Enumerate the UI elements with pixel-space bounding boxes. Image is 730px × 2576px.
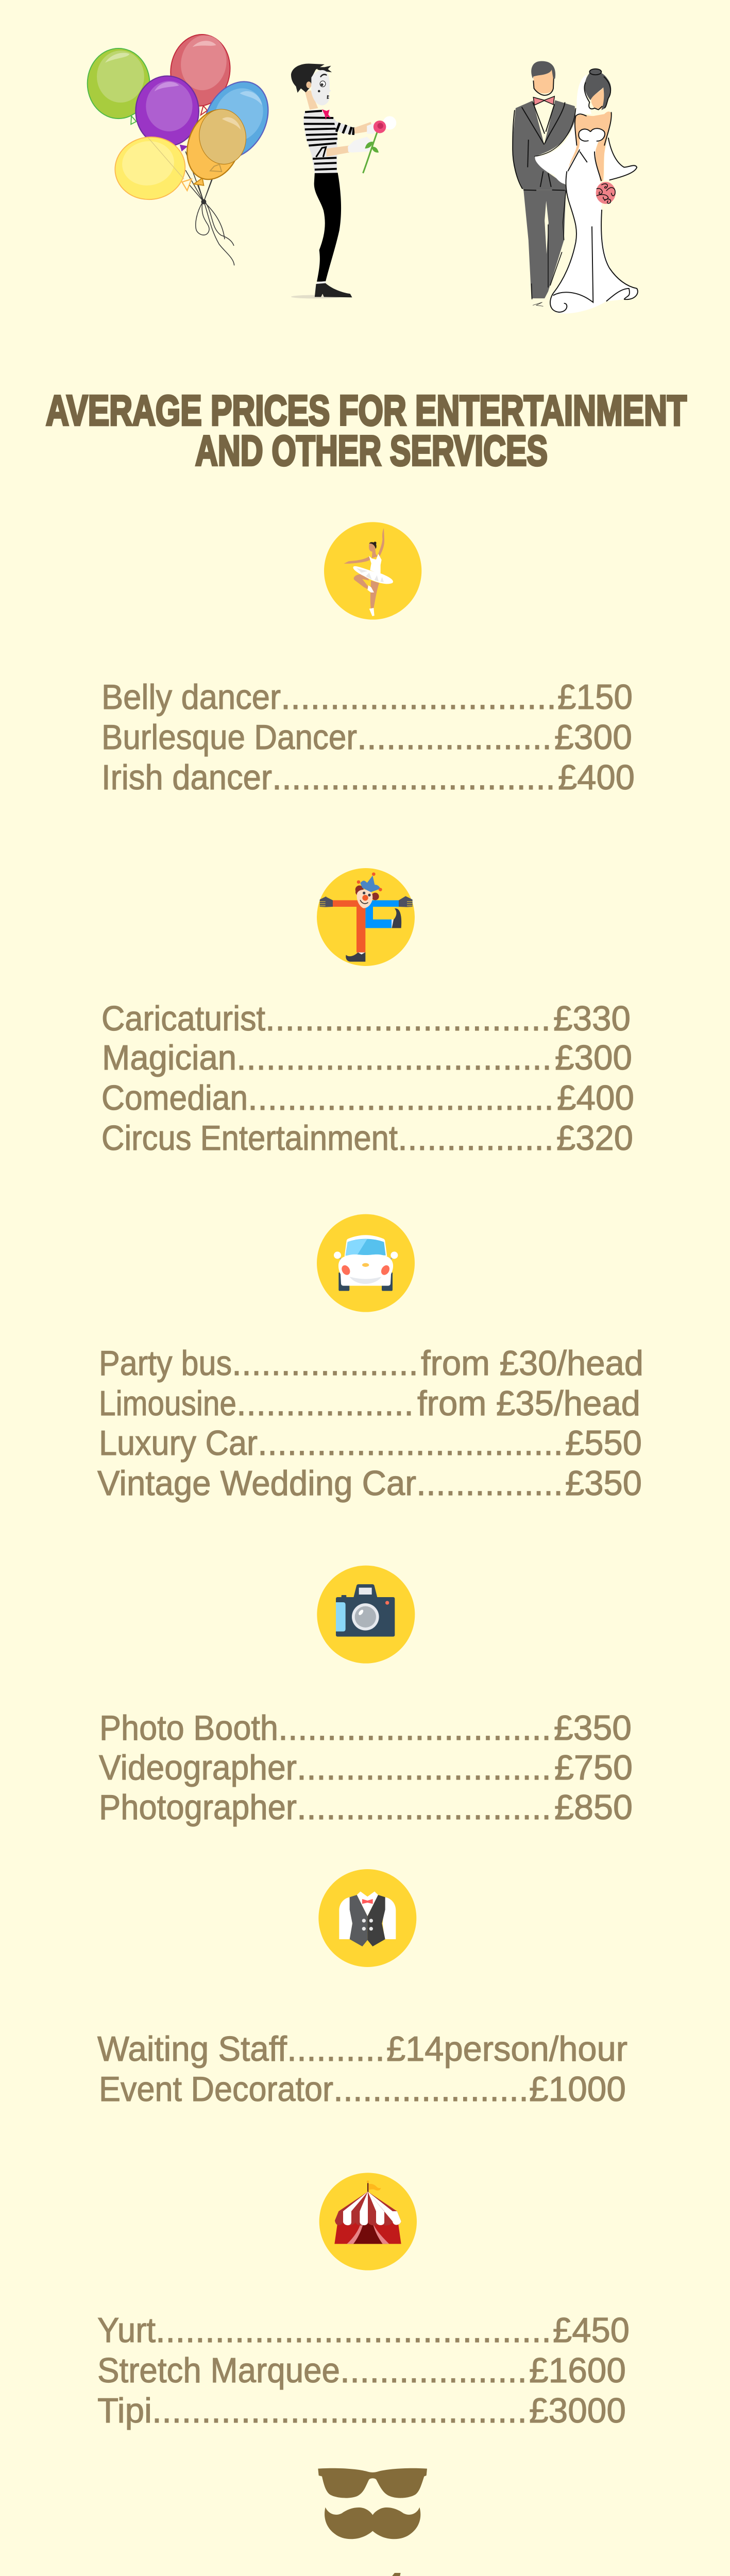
row: Burlesque Dancer: £300 [554, 718, 632, 757]
row: Irish dancer: ............................. [272, 758, 555, 797]
row: Irish dancer: £400 [558, 758, 635, 797]
row: Yurt: ........................................ [156, 2311, 551, 2350]
row: Yurt: Yurt [97, 2311, 156, 2350]
row: Comedian: £400 [557, 1078, 634, 1117]
row: Waiting Staff: £14person/hour [386, 2029, 627, 2069]
row: Videographer: £750 [554, 1748, 633, 1787]
icon: circus tent [319, 2173, 417, 2270]
row: Circus Entertainment: Circus Entertainment [101, 1118, 398, 1158]
row: Videographer: .......................... [297, 1748, 551, 1787]
title: AND OTHER SERVICES [195, 427, 548, 474]
row: Burlesque Dancer: Burlesque Dancer [101, 718, 357, 757]
icon: sunglasses and moustache logo [318, 2468, 427, 2539]
row: Belly dancer: £150 [557, 677, 633, 717]
row: Event Decorator: £1000 [529, 2070, 626, 2109]
row: Caricaturist: Caricaturist [101, 999, 265, 1038]
row: Tipi: £3000 [529, 2391, 626, 2430]
row: Comedian: Comedian [101, 1078, 248, 1117]
row: Videographer [99, 1748, 633, 1787]
row: Photo Booth: ............................ [278, 1708, 551, 1748]
icon: mime with rose [291, 63, 396, 298]
row: Party bus: ................... [232, 1344, 418, 1383]
row: Photo Booth: £350 [554, 1708, 632, 1748]
red balloon [166, 30, 234, 115]
bride [535, 69, 638, 314]
green balloon [88, 48, 150, 124]
row: Comedian [101, 1078, 634, 1117]
row: Tipi: Tipi [97, 2391, 152, 2430]
bouquet [596, 182, 616, 204]
yellow balloon [111, 132, 192, 204]
row: Party bus: Party bus [99, 1344, 232, 1383]
groom [513, 61, 576, 306]
icon: balloons bunch [88, 30, 281, 265]
row: Belly dancer: Belly dancer [101, 677, 281, 717]
section: staff price list [97, 2029, 627, 2109]
row: Event Decorator: .................... [333, 2070, 529, 2109]
row: Caricaturist: ............................. [265, 999, 551, 1038]
row: Photo Booth: Photo Booth [99, 1708, 278, 1748]
row: Luxury Car [99, 1423, 642, 1463]
row: Waiting Staff: .......... [287, 2029, 385, 2069]
bow tie [322, 109, 331, 120]
orange balloon [178, 102, 250, 187]
trousers [314, 173, 341, 282]
icon: camera [317, 1566, 415, 1664]
row: Belly dancer [101, 677, 633, 717]
section: photo price list [99, 1708, 633, 1827]
row: Limousine: .................. [236, 1384, 414, 1423]
icon: ballerina [324, 522, 421, 620]
striped shirt [303, 110, 337, 173]
row: Burlesque Dancer: .................... [357, 718, 552, 757]
row: Vintage Wedding Car: £350 [565, 1464, 642, 1503]
row: Videographer: Videographer [99, 1748, 297, 1787]
row: Luxury Car: ............................... [258, 1423, 563, 1463]
section: venue price list [97, 2311, 630, 2430]
row: Magician: Magician [102, 1038, 236, 1077]
row: Event Decorator [99, 2070, 626, 2109]
row: Magician: ................................ [236, 1038, 552, 1077]
row: Stretch Marquee: £1600 [529, 2351, 626, 2390]
icon: waiter vest [318, 1869, 416, 1967]
row: Waiting Staff: Waiting Staff [97, 2029, 287, 2069]
row: Yurt: £450 [553, 2311, 630, 2350]
row: Caricaturist [101, 999, 631, 1038]
row: Stretch Marquee: ................... [340, 2351, 527, 2390]
row: Circus Entertainment: £320 [556, 1118, 633, 1158]
section: dancers price list [101, 677, 635, 797]
row: Caricaturist: £330 [553, 999, 631, 1038]
row: Stretch Marquee [97, 2351, 626, 2390]
row: Belly dancer: ............................ [281, 677, 556, 717]
white glove [348, 137, 372, 152]
icon: bride and groom [513, 61, 638, 314]
row: Waiting Staff [97, 2029, 627, 2069]
row: Luxury Car: Luxury Car [99, 1423, 258, 1463]
row: Limousine [99, 1384, 640, 1423]
row: Irish dancer: Irish dancer [101, 758, 272, 797]
section: acts price list [101, 999, 634, 1158]
row: Party bus: from £30/head [421, 1344, 643, 1383]
row: Tipi: ...................................... [152, 2391, 527, 2430]
row: Vintage Wedding Car [97, 1464, 642, 1503]
row: Burlesque Dancer [101, 718, 632, 757]
row: Party bus [99, 1344, 643, 1383]
section: transport price list [97, 1344, 643, 1503]
row: Limousine: Limousine [99, 1384, 236, 1423]
rose [363, 116, 396, 173]
row: Magician: £300 [555, 1038, 632, 1077]
row: Magician [102, 1038, 632, 1077]
row: Circus Entertainment: ................ [398, 1118, 554, 1158]
shoe [315, 283, 352, 297]
row: Circus Entertainment [101, 1118, 633, 1158]
row: Comedian: ............................... [248, 1078, 554, 1117]
row: Luxury Car: £550 [565, 1423, 642, 1463]
row: Photographer: £850 [554, 1788, 633, 1827]
row: Limousine: from £35/head [417, 1384, 640, 1423]
row: Photographer: Photographer [99, 1788, 297, 1827]
purple balloon [135, 76, 199, 151]
blue balloon [191, 71, 281, 170]
row: Stretch Marquee: Stretch Marquee [97, 2351, 340, 2390]
row: Vintage Wedding Car: ............... [416, 1464, 563, 1503]
row: Photo Booth [99, 1708, 632, 1748]
striped upper arm [334, 120, 355, 135]
row: Event Decorator: Event Decorator [99, 2070, 333, 2109]
row: Photographer: .......................... [297, 1788, 551, 1827]
title [46, 386, 687, 474]
icon: car [317, 1214, 415, 1312]
row: Vintage Wedding Car: Vintage Wedding Car [97, 1464, 416, 1503]
row: Photographer [99, 1788, 633, 1827]
icon: clown [317, 868, 415, 966]
row: Irish dancer [101, 758, 635, 797]
